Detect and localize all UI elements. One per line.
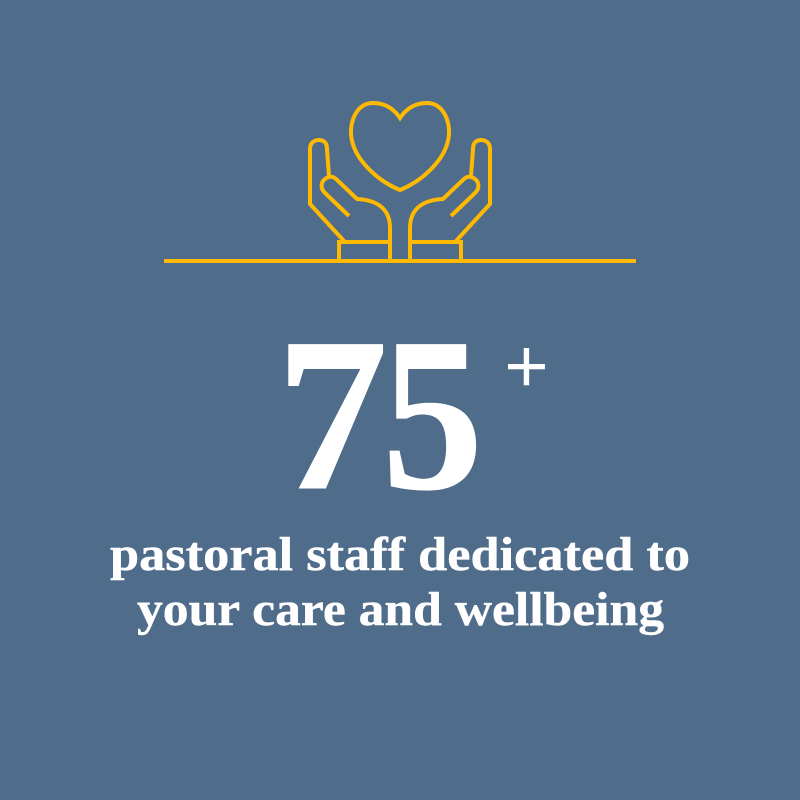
icon: right cuff <box>410 242 461 261</box>
icon: left cuff <box>339 242 390 261</box>
caption <box>110 528 690 636</box>
caption line 2: your care and wellbeing <box>137 583 664 636</box>
plus sign: + <box>505 325 548 409</box>
horizontal rule <box>164 259 636 263</box>
icon: heart <box>351 103 449 190</box>
digit 5: 5 <box>382 294 483 536</box>
caption line 1: pastoral staff dedicated to <box>110 528 690 581</box>
icon: right hand <box>410 140 490 261</box>
icon: left hand <box>310 140 390 261</box>
icon: hands holding heart <box>310 103 490 261</box>
digit 7: 7 <box>276 294 388 536</box>
big number <box>276 294 483 536</box>
